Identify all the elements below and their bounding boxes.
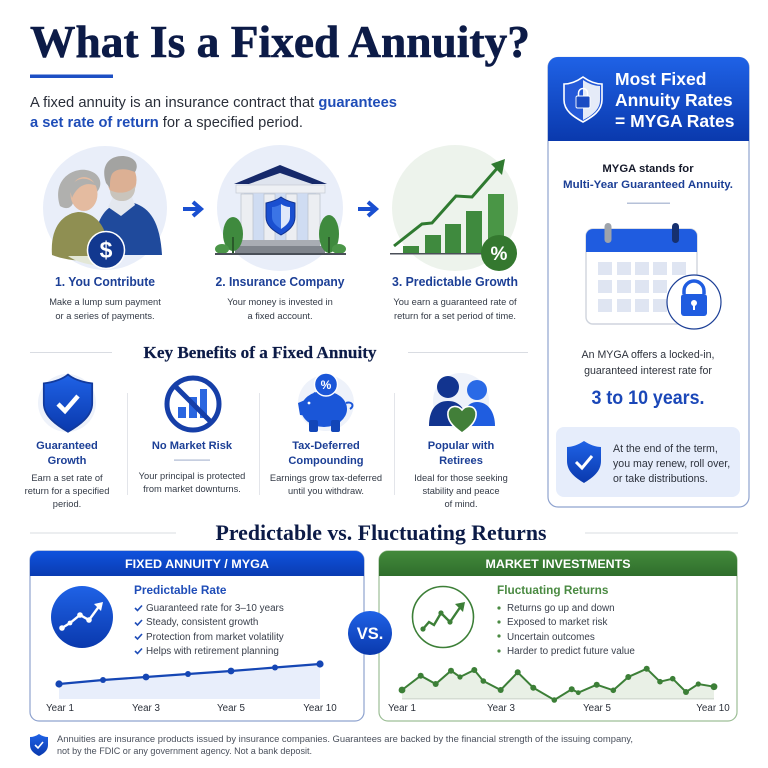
step 3 description: return for a set period of time. xyxy=(394,311,516,321)
panel title: Annuity Rates xyxy=(615,90,733,110)
step 3 heading: 3. Predictable Growth xyxy=(392,274,518,289)
subheading: Fluctuating Returns xyxy=(497,583,609,597)
bullet list: Exposed to market risk xyxy=(507,617,607,628)
heading: predictable vs fluctuating: Predictable vs. Fluctuating Returns xyxy=(216,520,547,545)
benefit description: Your principal is protected xyxy=(139,471,245,481)
vs badge: VS. xyxy=(357,625,383,643)
benefit: tax-deferred compounding xyxy=(270,373,382,496)
step 2 description: Your money is invested in xyxy=(227,297,333,307)
panel header xyxy=(30,551,364,576)
panel: fixed annuity xyxy=(30,551,364,721)
line chart: volatile returns: Year 5 xyxy=(583,703,612,714)
arrow 2 xyxy=(358,202,376,216)
panel title: = MYGA Rates xyxy=(615,111,735,131)
benefit heading xyxy=(428,440,495,467)
benefit: no market risk xyxy=(139,378,245,494)
benefit: guaranteed growth xyxy=(25,374,109,509)
line chart: volatile returns: Year 10 xyxy=(696,703,730,714)
step 3 description: You earn a guaranteed rate of xyxy=(393,297,517,307)
benefit heading: Tax-Deferred xyxy=(292,440,360,452)
icon: shield check xyxy=(38,374,96,432)
benefit description: Earnings grow tax-deferred xyxy=(270,473,382,483)
arrow 1 xyxy=(183,202,201,216)
line chart: steady growth: Year 5 xyxy=(217,703,246,714)
checklist: Guaranteed rate for 3–10 years xyxy=(146,603,284,614)
icon: two people and heart xyxy=(429,373,495,433)
vs badge xyxy=(348,611,392,655)
benefit description: of mind. xyxy=(444,499,478,509)
benefit heading: Growth xyxy=(48,455,87,467)
benefit description: Earn a set rate of xyxy=(31,473,103,483)
line chart: steady growth: Year 1 xyxy=(46,703,74,714)
benefit description xyxy=(139,471,245,494)
callout: end of term: you may renew, roll over, xyxy=(613,458,730,470)
step 1: you contribute xyxy=(43,146,167,321)
benefit heading xyxy=(288,440,364,467)
icon: shield lock xyxy=(564,77,602,122)
benefit heading: Guaranteed xyxy=(36,440,98,452)
step 2: insurance company xyxy=(215,145,346,321)
bullet list: Uncertain outcomes xyxy=(507,632,595,643)
benefit heading: No Market Risk xyxy=(152,440,233,452)
icon: couple with dollar badge xyxy=(43,146,167,270)
checklist: Steady, consistent growth xyxy=(146,617,258,628)
footnote: not by the FDIC or any government agency. Not a bank deposit. xyxy=(57,746,312,756)
benefit description: return for a specified xyxy=(25,486,109,496)
MYGA definition xyxy=(563,163,733,191)
callout: 3 to 10 years: 3 to 10 years. xyxy=(592,388,704,409)
benefit description: from market downturns. xyxy=(143,484,241,494)
benefit description xyxy=(25,473,109,509)
benefit description: Ideal for those seeking xyxy=(414,473,508,483)
footnote xyxy=(30,734,633,756)
intro text: a set rate of return for a specified period. xyxy=(30,115,303,131)
panel: market investments xyxy=(379,551,737,721)
step 1 description: Make a lump sum payment xyxy=(49,297,161,307)
benefit: popular with retirees xyxy=(414,373,508,509)
benefit heading: Popular with xyxy=(428,440,495,452)
line chart: volatile returns: Year 1 xyxy=(388,703,416,714)
panel title: Most Fixed xyxy=(615,69,706,89)
line chart: steady growth xyxy=(46,660,337,714)
MYGA description: guaranteed interest rate for xyxy=(584,365,712,377)
bullet list xyxy=(497,603,635,657)
benefit heading xyxy=(36,440,98,467)
icon: growth chart with percent badge xyxy=(390,145,518,271)
icon: no bars xyxy=(167,378,219,430)
step 2 description xyxy=(227,297,333,321)
icon: volatile line circle xyxy=(412,586,474,648)
panel: MYGA xyxy=(548,57,749,507)
panel header xyxy=(548,57,749,141)
title: What Is a Fixed Annuity? xyxy=(30,16,530,67)
icon: growth chart with percent badge: % xyxy=(491,244,508,265)
panel header xyxy=(379,551,737,576)
line chart: volatile returns xyxy=(388,666,730,714)
MYGA description xyxy=(582,349,714,377)
panel heading: FIXED ANNUITY / MYGA xyxy=(125,557,269,571)
callout: end of term: or take distributions. xyxy=(613,473,708,485)
checklist: Helps with retirement planning xyxy=(146,646,279,657)
MYGA definition: MYGA stands for xyxy=(602,163,694,175)
intro text xyxy=(30,95,397,131)
line chart: steady growth: Year 10 xyxy=(303,703,337,714)
icon: piggy bank: % xyxy=(321,378,332,392)
benefit heading: Compounding xyxy=(288,455,364,467)
benefit description xyxy=(414,473,508,509)
subheading: Predictable Rate xyxy=(134,583,227,597)
step 3: predictable growth xyxy=(390,145,518,321)
step 1 heading: 1. You Contribute xyxy=(55,274,155,289)
benefit description: period. xyxy=(53,499,81,509)
bullet list: Harder to predict future value xyxy=(507,646,635,657)
panel title xyxy=(615,69,735,131)
step 1 description xyxy=(49,297,161,321)
heading: key benefits: Key Benefits of a Fixed Annuity xyxy=(144,343,377,362)
step 2 description: a fixed account. xyxy=(247,311,313,321)
benefit description xyxy=(270,473,382,496)
callout: end of term: At the end of the term, xyxy=(613,443,718,455)
step 3 description xyxy=(393,297,517,321)
benefit heading: Retirees xyxy=(439,455,483,467)
benefit description: until you withdraw. xyxy=(288,486,364,496)
icon: line up circle xyxy=(51,586,113,648)
line chart: volatile returns: Year 3 xyxy=(487,703,516,714)
bullet list: Returns go up and down xyxy=(507,603,615,614)
benefit description: stability and peace xyxy=(422,486,500,496)
callout: end of term xyxy=(556,427,740,497)
MYGA description: An MYGA offers a locked-in, xyxy=(582,349,714,361)
icon: couple with dollar badge: $ xyxy=(100,237,113,263)
title underline xyxy=(30,74,113,78)
icon: bank with shield xyxy=(215,145,346,271)
line chart: steady growth: Year 3 xyxy=(132,703,161,714)
icon: calendar with lock xyxy=(586,223,721,329)
MYGA definition: Multi-Year Guaranteed Annuity. xyxy=(563,179,733,191)
step 1 description: or a series of payments. xyxy=(55,311,155,321)
step 2 heading: 2. Insurance Company xyxy=(216,274,345,289)
intro text: A fixed annuity is an insurance contract that guarantees xyxy=(30,95,397,111)
checklist: Protection from market volatility xyxy=(146,632,284,643)
checklist xyxy=(135,603,284,657)
panel heading: MARKET INVESTMENTS xyxy=(486,557,630,571)
icon: footer shield xyxy=(30,734,48,756)
footnote: Annuities are insurance products issued by insurance companies. Guarantees are backed by the financial strength of the issuing company, xyxy=(57,734,633,744)
icon: shield check small xyxy=(567,441,601,483)
